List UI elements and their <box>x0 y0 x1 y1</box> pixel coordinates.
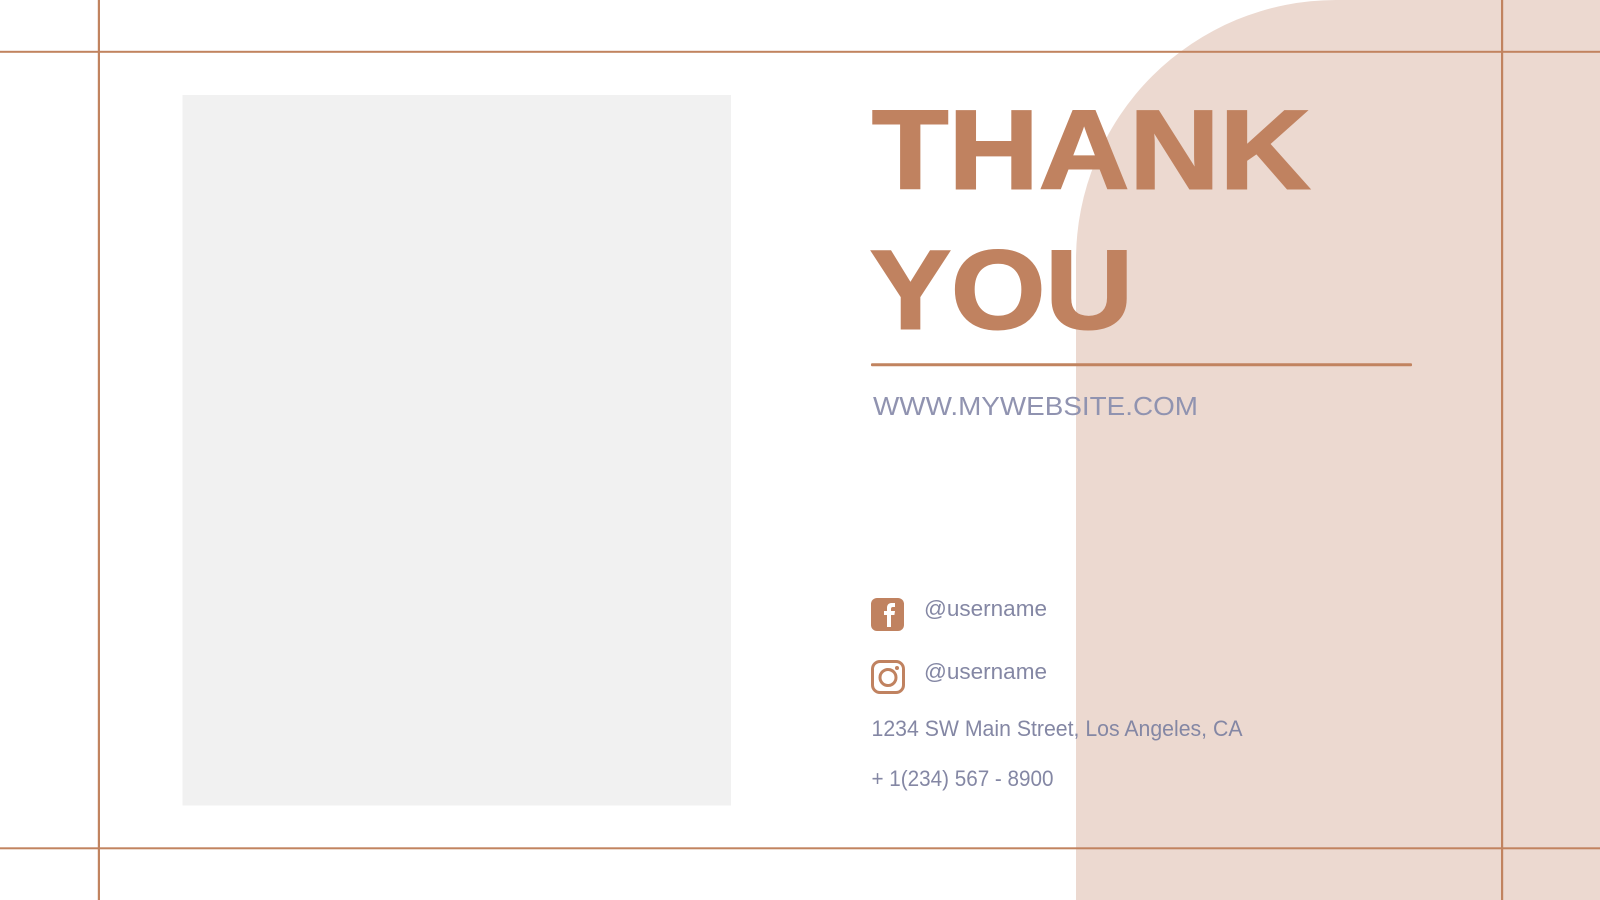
street address: 1234 SW Main Street, Los Angeles, CA <box>872 716 1243 741</box>
background panel: rounded beige shape <box>1076 0 1600 900</box>
photo placeholder panel <box>182 95 731 806</box>
facebook username: @username <box>924 596 1047 621</box>
title: thank you <box>870 87 1310 352</box>
title divider <box>871 363 1412 366</box>
title: thank you: THANK <box>872 87 1310 212</box>
website address: WWW.MYWEBSITE.COM <box>873 391 1198 421</box>
icon: facebook <box>871 598 904 631</box>
phone number: + 1(234) 567 - 8900 <box>872 766 1054 791</box>
title: thank you: YOU <box>870 227 1133 352</box>
icon: instagram <box>872 662 904 692</box>
instagram username: @username <box>924 659 1047 684</box>
